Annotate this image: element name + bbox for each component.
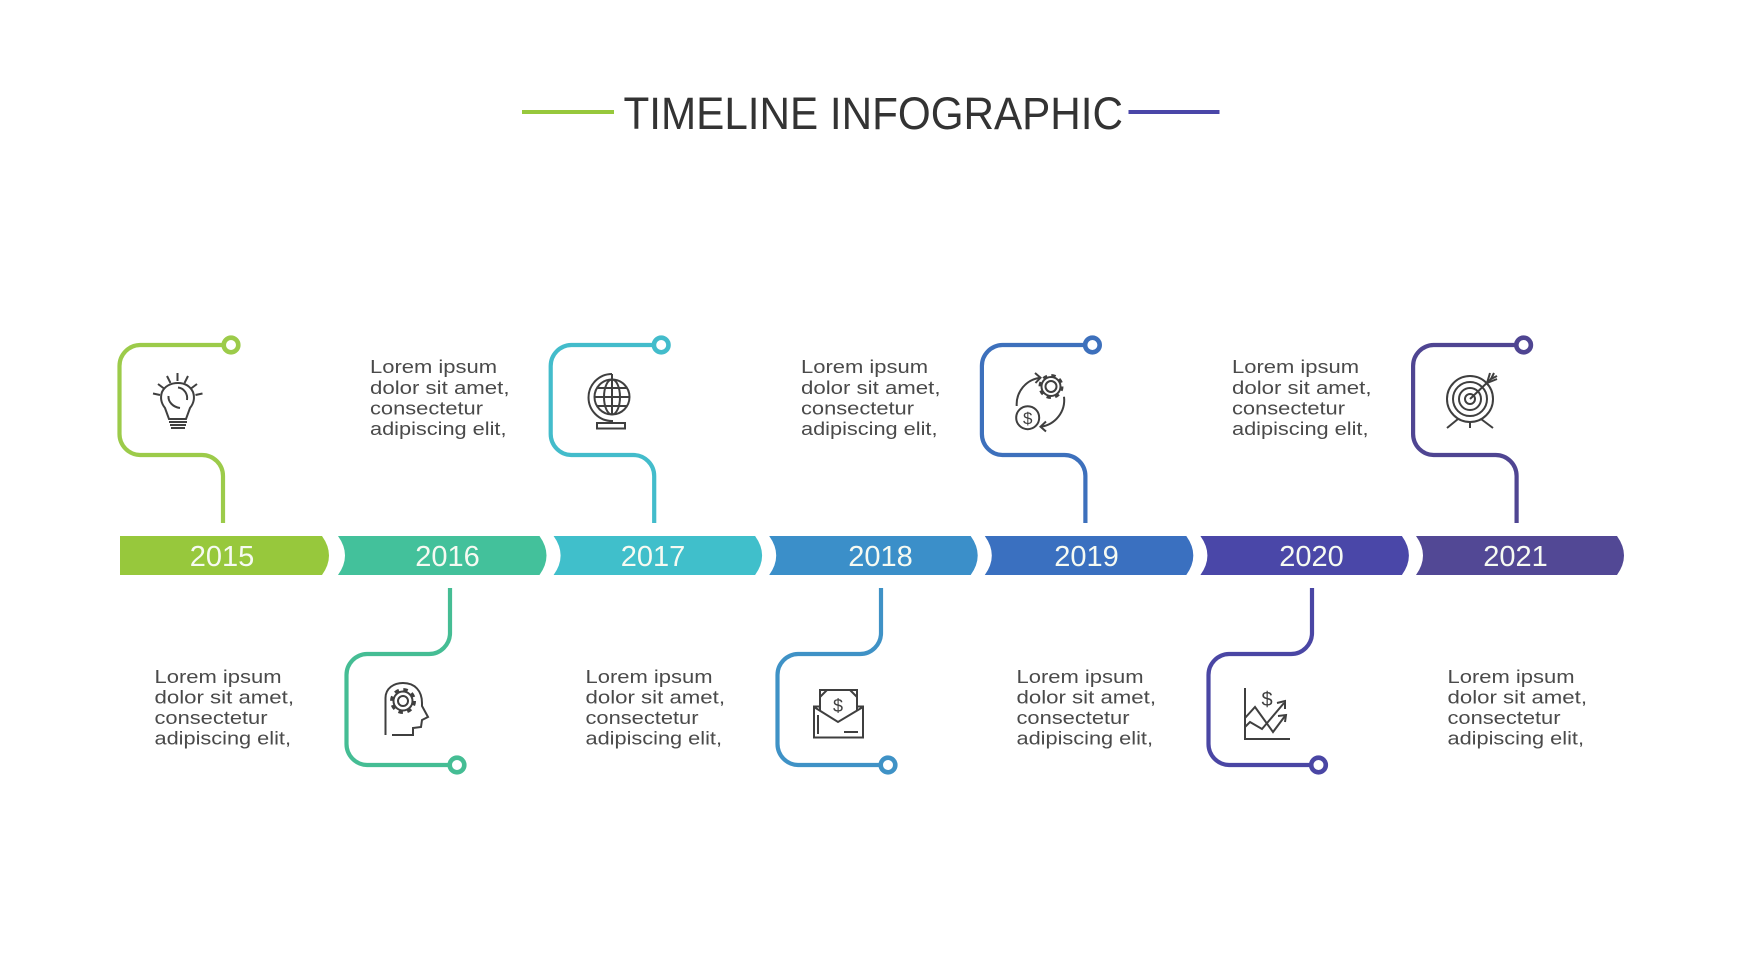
connector 2018 <box>778 588 895 772</box>
text: 2021 description: adipiscing elit, <box>1448 728 1584 748</box>
text: 2016 description: Lorem ipsum <box>370 356 497 377</box>
segment 2020 <box>1200 536 1409 575</box>
text: 2015 description <box>154 666 294 748</box>
text: 2020 description: adipiscing elit, <box>1232 418 1368 439</box>
segment 2016: 2016 <box>415 541 480 573</box>
text: 2021 description: Lorem ipsum <box>1448 666 1574 687</box>
text: 2018 description: dolor sit amet, <box>801 377 940 398</box>
icon: money and gear cycle <box>1016 373 1064 432</box>
segment 2018 <box>769 536 978 575</box>
text: 2018 description: adipiscing elit, <box>801 418 938 439</box>
text: 2019 description: Lorem ipsum <box>1016 666 1144 687</box>
connector 2020 <box>1208 588 1326 772</box>
text: 2021 description: dolor sit amet, <box>1448 686 1587 708</box>
segment 2016 <box>338 536 546 575</box>
connector 2016 <box>346 588 464 772</box>
timeline bar <box>120 536 1624 575</box>
text: 2017 description: consectetur <box>586 707 698 728</box>
text: 2021 description <box>1448 666 1587 748</box>
text: 2019 description: consectetur <box>1016 707 1130 728</box>
text: 2015 description: dolor sit amet, <box>154 686 294 708</box>
connector 2019 <box>982 338 1100 523</box>
icon: envelope with money <box>814 690 863 738</box>
segment 2017: 2017 <box>621 541 685 573</box>
text: 2019 description: dolor sit amet, <box>1016 686 1156 708</box>
segment 2020: 2020 <box>1279 541 1344 573</box>
icon: globe <box>589 374 630 428</box>
connector 2015 <box>119 338 238 523</box>
text: 2020 description: Lorem ipsum <box>1232 356 1359 377</box>
segment 2019 <box>985 536 1193 575</box>
icon: money and gear cycle: $ <box>1023 409 1033 428</box>
text: 2017 description: adipiscing elit, <box>586 728 722 748</box>
text: 2015 description: consectetur <box>154 707 268 728</box>
text: 2017 description: dolor sit amet, <box>586 686 725 708</box>
segment 2017 <box>554 536 762 575</box>
text: 2018 description <box>801 356 940 439</box>
segment 2018: 2018 <box>848 541 913 573</box>
text: 2020 description: consectetur <box>1232 398 1345 418</box>
text: 2017 description <box>586 666 725 748</box>
text: 2016 description: adipiscing elit, <box>370 418 506 439</box>
text: 2020 description <box>1232 356 1372 439</box>
icon: head with gear <box>386 683 428 735</box>
text: 2016 description <box>370 356 510 439</box>
connector 2021 <box>1413 338 1531 523</box>
text: 2015 description: Lorem ipsum <box>154 666 282 687</box>
text: 2020 description: dolor sit amet, <box>1232 377 1372 398</box>
text: 2018 description: consectetur <box>801 398 914 418</box>
icon: chart with dollar <box>1245 688 1290 739</box>
segment 2015: 2015 <box>190 541 254 573</box>
segment 2019: 2019 <box>1054 541 1119 573</box>
title: TIMELINE INFOGRAPHIC <box>624 88 1123 139</box>
segment 2021 <box>1416 536 1624 575</box>
text: 2017 description: Lorem ipsum <box>586 666 712 687</box>
text: 2019 description: adipiscing elit, <box>1016 728 1153 748</box>
connector 2017 <box>551 338 668 523</box>
icon: target with arrow <box>1447 373 1497 428</box>
text: 2019 description <box>1016 666 1156 748</box>
text: 2016 description: consectetur <box>370 398 483 418</box>
text: 2016 description: dolor sit amet, <box>370 377 510 398</box>
icon: envelope with money: $ <box>833 696 843 716</box>
icon: light bulb <box>153 373 202 428</box>
icon: chart with dollar: $ <box>1261 689 1273 711</box>
text: 2015 description: adipiscing elit, <box>154 728 291 748</box>
text: 2018 description: Lorem ipsum <box>801 356 928 377</box>
text: 2021 description: consectetur <box>1448 707 1560 728</box>
segment 2021: 2021 <box>1483 541 1548 573</box>
segment 2015 <box>120 536 329 575</box>
